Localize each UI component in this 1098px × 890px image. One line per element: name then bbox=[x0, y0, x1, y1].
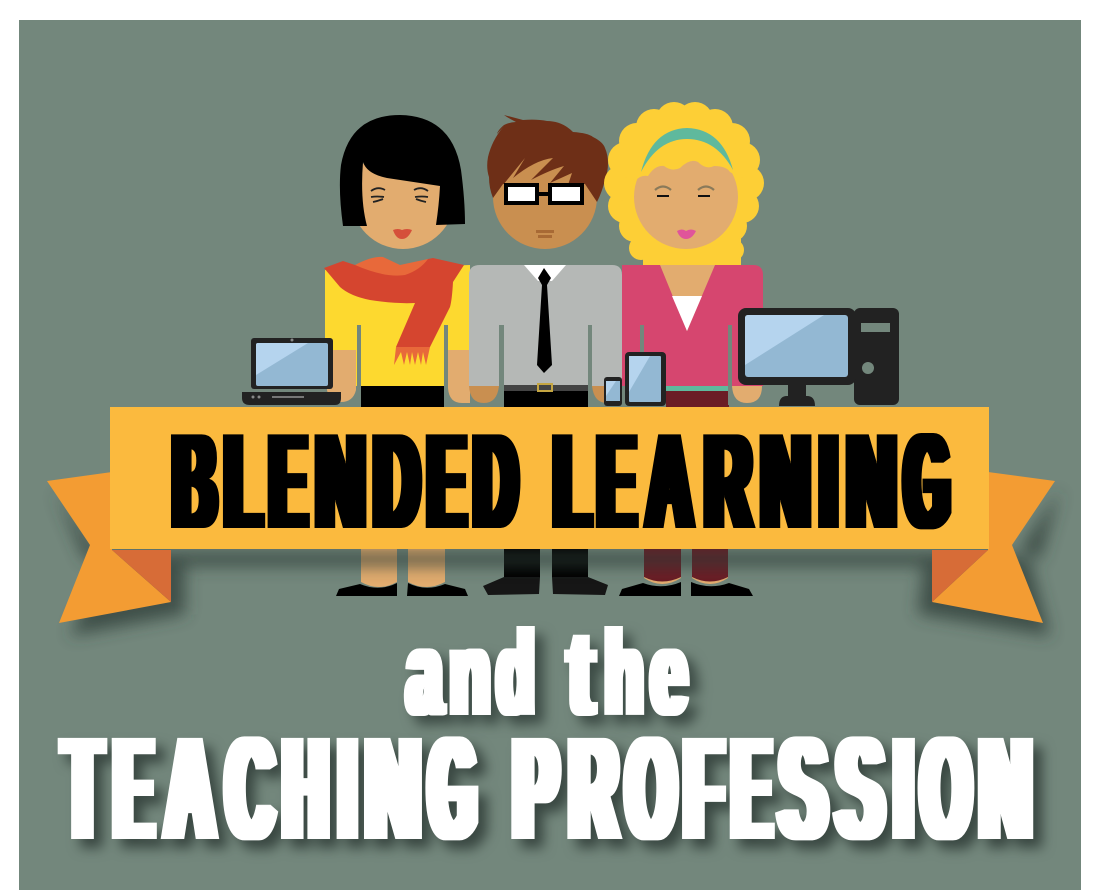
subtitle: teaching profession: S bbox=[837, 707, 883, 871]
text: N bbox=[980, 707, 1031, 871]
body bbox=[325, 265, 470, 386]
ribbon banner bbox=[47, 405, 1060, 636]
banner title: R bbox=[705, 405, 751, 557]
headband bbox=[641, 128, 733, 172]
subtitle: teaching profession: I bbox=[895, 707, 912, 871]
character: woman with black hair and scarf bbox=[324, 115, 470, 596]
banner title: N bbox=[847, 405, 896, 557]
belt and trousers bbox=[504, 385, 588, 391]
belt and skirt bbox=[666, 386, 729, 391]
subtitle: and the: e bbox=[651, 606, 687, 740]
legs and shoes bbox=[336, 540, 468, 596]
legs and shoes bbox=[619, 540, 753, 596]
icon: smartphone bbox=[604, 377, 622, 406]
subtitle: teaching profession: O bbox=[922, 707, 970, 871]
subtitle: teaching profession: H bbox=[284, 707, 327, 871]
curly hair bbox=[604, 102, 764, 267]
body bbox=[622, 265, 763, 386]
banner title: D bbox=[374, 405, 419, 557]
hair bbox=[340, 115, 465, 226]
subtitle: teaching profession: R bbox=[570, 707, 617, 871]
banner title: N bbox=[316, 405, 365, 557]
eyes bbox=[655, 186, 714, 190]
hands bbox=[469, 386, 622, 403]
subtitle: teaching profession: C bbox=[227, 707, 273, 871]
tie bbox=[537, 268, 552, 373]
banner title: E bbox=[270, 405, 306, 557]
icon: laptop bbox=[242, 338, 341, 405]
subtitle: teaching profession: O bbox=[627, 707, 675, 871]
icon: desktop computer bbox=[738, 308, 899, 406]
jacket bbox=[469, 265, 622, 386]
subtitle: and the: n bbox=[450, 606, 490, 740]
forehead bbox=[503, 158, 572, 185]
subtitle: and the: t bbox=[568, 606, 594, 740]
right tail bbox=[932, 472, 1055, 623]
subtitle: teaching profession: A bbox=[166, 707, 214, 871]
character: man with glasses and tie bbox=[469, 115, 622, 595]
banner title: B bbox=[173, 405, 216, 557]
face bbox=[634, 145, 738, 249]
scarf fringe bbox=[394, 347, 430, 365]
ribbon shadows bbox=[55, 490, 1060, 636]
left tail bbox=[47, 472, 171, 623]
lips bbox=[393, 229, 412, 239]
banner title: N bbox=[761, 405, 810, 557]
arms bbox=[326, 350, 356, 402]
banner title: L bbox=[554, 405, 590, 557]
subtitle: teaching profession: E bbox=[115, 707, 152, 871]
fringe bbox=[632, 130, 740, 186]
subtitle: and the: a bbox=[407, 606, 443, 740]
eyes bbox=[371, 188, 428, 202]
subtitle: teaching profession: S bbox=[780, 707, 826, 871]
banner title: E bbox=[428, 405, 465, 557]
character: woman with curly blonde hair bbox=[604, 102, 764, 596]
collar bbox=[524, 265, 566, 281]
subtitle: teaching profession: N bbox=[366, 707, 420, 871]
subtitle: teaching profession: I bbox=[340, 707, 355, 871]
head bbox=[493, 145, 597, 249]
lips bbox=[677, 230, 696, 239]
banner title: D bbox=[474, 405, 517, 557]
subtitle: and the: d bbox=[497, 606, 534, 740]
banner title: L bbox=[225, 405, 261, 557]
banner title: E bbox=[598, 405, 635, 557]
banner title: I bbox=[820, 405, 837, 557]
scarf bbox=[355, 257, 432, 282]
ribbon banner: G bbox=[905, 405, 949, 557]
legs and shoes bbox=[483, 540, 608, 595]
mouth bbox=[536, 230, 554, 238]
banner bbox=[110, 407, 989, 549]
subtitle: teaching profession: E bbox=[733, 707, 770, 871]
hair bbox=[487, 115, 608, 202]
neckline bbox=[660, 265, 715, 331]
subtitle: and the: h bbox=[605, 606, 643, 740]
banner title: A bbox=[647, 405, 692, 557]
subtitle: teaching profession: G bbox=[430, 707, 475, 871]
icon: tablet bbox=[625, 352, 666, 406]
subtitle: teaching profession: P bbox=[514, 707, 557, 871]
head bbox=[351, 145, 455, 249]
subtitle: teaching profession: F bbox=[685, 707, 722, 871]
hand bbox=[732, 386, 762, 403]
subtitle: teaching profession: T bbox=[64, 707, 101, 871]
glasses bbox=[506, 185, 582, 203]
